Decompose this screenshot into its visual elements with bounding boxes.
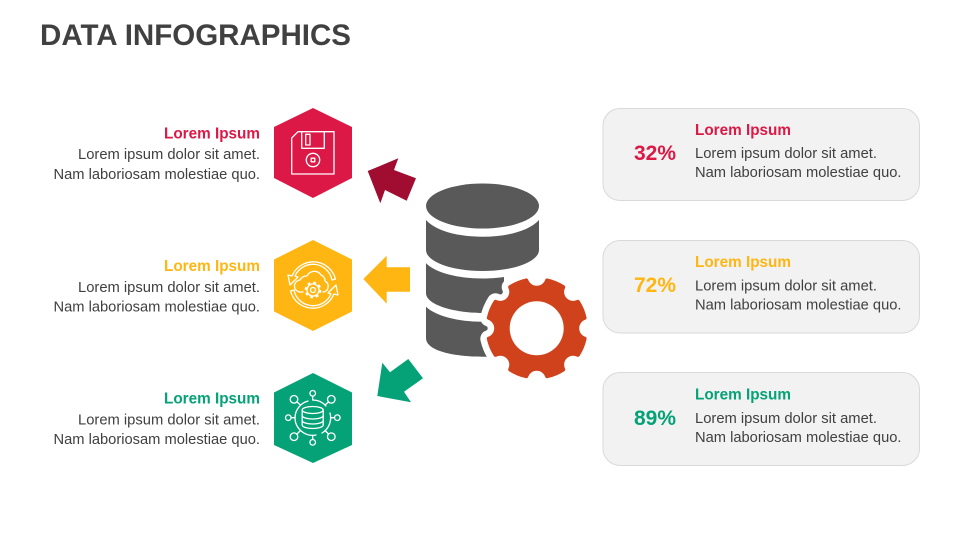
left item: yellow text block: Lorem Ipsum	[164, 258, 260, 275]
card text: green	[695, 386, 902, 446]
card text: green: Nam laboriosam molestiae quo.	[695, 429, 902, 446]
panel: 32% card	[603, 108, 920, 200]
percentage: 32%: 32%	[634, 142, 676, 165]
title: DATA INFOGRAPHICS	[40, 19, 351, 52]
left item: yellow text block: Nam laboriosam molestiae quo.	[54, 298, 260, 316]
arrow: dark red, pointing up-left	[368, 158, 416, 203]
red hexagon with floppy disk icon	[274, 108, 352, 198]
arrow: yellow, pointing left	[363, 256, 410, 304]
card text: yellow: Lorem Ipsum	[695, 254, 791, 271]
left item: red text block: Lorem ipsum dolor sit amet.	[78, 146, 260, 163]
card text: green: Lorem Ipsum	[695, 386, 791, 404]
arrow: green, pointing down-left	[377, 359, 423, 402]
central gear icon	[489, 280, 585, 376]
percentage: 72%: 72%	[634, 274, 676, 297]
icon: database network	[286, 390, 340, 445]
icon: floppy disk	[292, 132, 334, 174]
left item: green text block	[54, 390, 260, 448]
icon: cloud with gear and cycle arrows	[288, 262, 338, 308]
card text: red: Nam laboriosam molestiae quo.	[695, 164, 902, 181]
left item: red text block: Nam laboriosam molestiae quo.	[54, 166, 260, 183]
card text: red: Lorem ipsum dolor sit amet.	[695, 145, 877, 162]
left item: red text block	[54, 126, 260, 183]
left item: red text block: Lorem Ipsum	[164, 126, 260, 142]
central database icon	[426, 184, 539, 357]
green hexagon with database network icon	[274, 373, 352, 463]
yellow hexagon with cloud gear icon	[274, 240, 352, 331]
left item: green text block: Lorem ipsum dolor sit amet.	[78, 412, 260, 428]
left item: green text block: Lorem Ipsum	[164, 390, 260, 408]
card text: green: Lorem ipsum dolor sit amet.	[695, 410, 877, 427]
panel: 89% card	[603, 372, 920, 466]
card text: yellow	[695, 254, 902, 314]
left item: yellow text block: Lorem ipsum dolor sit amet.	[78, 279, 260, 296]
left item: green text block: Nam laboriosam molestiae quo.	[54, 431, 260, 448]
percentage: 89%: 89%	[634, 407, 676, 430]
card text: red: Lorem Ipsum	[695, 122, 791, 139]
card text: red	[695, 122, 902, 181]
card text: yellow: Lorem ipsum dolor sit amet.	[695, 278, 877, 294]
card text: yellow: Nam laboriosam molestiae quo.	[695, 296, 902, 314]
left item: yellow text block	[54, 258, 260, 316]
panel: 72% card	[603, 240, 920, 333]
